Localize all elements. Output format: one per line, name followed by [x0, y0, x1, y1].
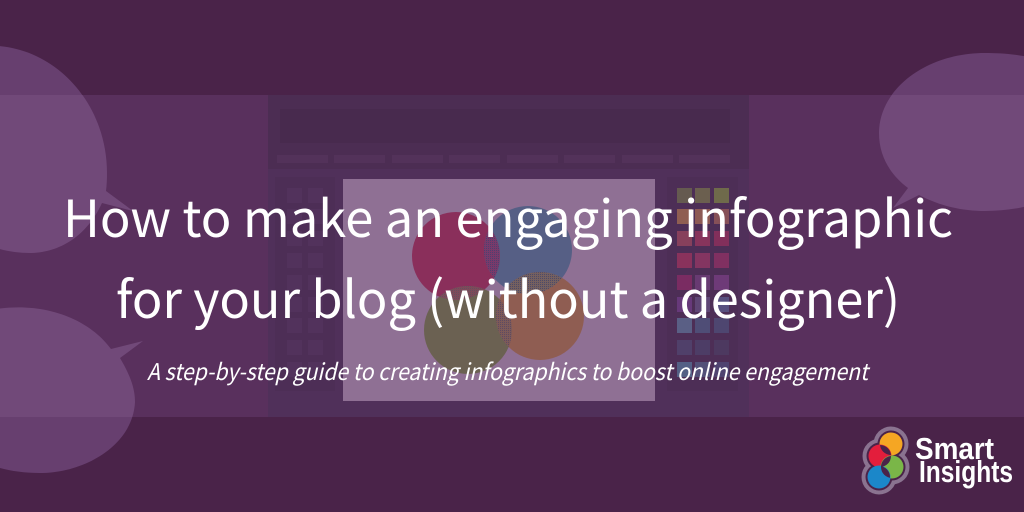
purple band — [0, 95, 1024, 417]
subtitle: A step-by-step guide to creating infographics to boost online engagement — [147, 353, 871, 387]
title: for your blog (without a designer) — [116, 259, 900, 333]
right colour swatch panel — [667, 177, 738, 391]
title — [63, 178, 953, 333]
design app window — [268, 95, 749, 417]
speech bubbles inside the band — [0, 95, 1024, 417]
logo wordmark: Smart — [915, 431, 994, 466]
app toolbar — [268, 95, 749, 169]
left tool panel — [275, 177, 335, 391]
Smart Insights logo — [862, 426, 1013, 494]
canvas with overlapping circles — [343, 179, 655, 401]
title: How to make an engaging infographic — [63, 178, 953, 252]
logo icon: overlapping circles — [862, 426, 910, 494]
logo wordmark — [915, 431, 1013, 489]
